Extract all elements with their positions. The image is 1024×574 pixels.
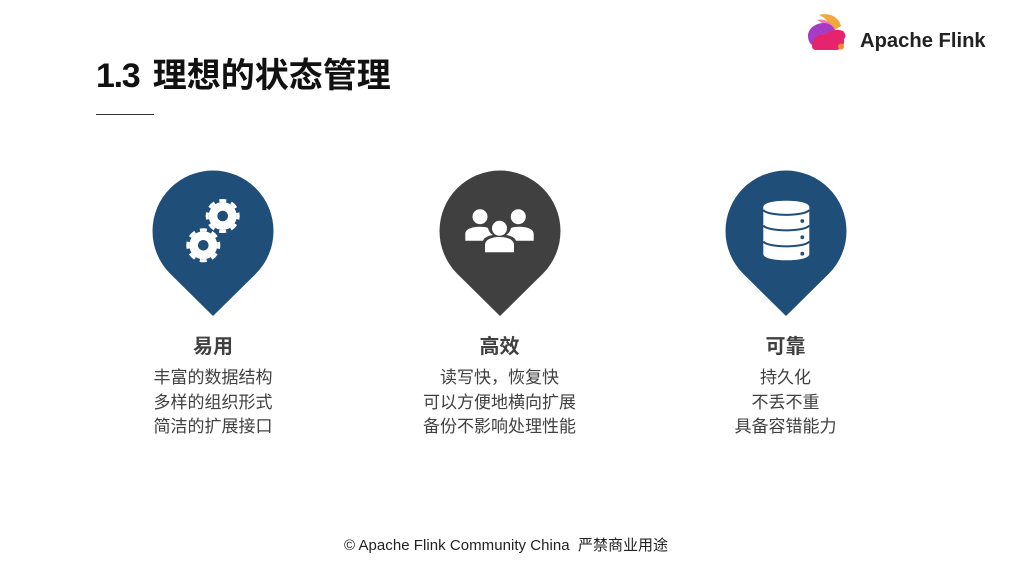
icon: database pin [726,170,846,316]
text: 易用: 简洁的扩展接口 [154,417,272,436]
text: 可靠: 具备容错能力 [734,417,836,436]
text: 可靠: 持久化 [760,368,811,387]
panel: 高效 [423,170,576,436]
logo: Apache Flink: Apache Flink [860,30,986,52]
text: 易用 [154,336,272,436]
text: 高效 [423,336,576,436]
text: 易用: 丰富的数据结构 [154,368,272,387]
text: 易用: 易用 [193,336,233,358]
icon: people pin [440,170,560,316]
text: 可靠 [734,336,836,436]
text: 高效: 备份不影响处理性能 [423,417,576,436]
text: 可靠: 不丢不重 [752,392,820,412]
panel: 可靠 [726,170,846,436]
title: 1.3 理想的状态管理 [96,57,391,95]
text: 高效: 读写快，恢复快 [440,368,559,387]
icon: gears pin [152,170,274,316]
logo: Apache Flink [808,14,986,52]
title underline [96,114,154,115]
footer: © Apache Flink Community China 严禁商业用途 [344,537,668,554]
panel: 易用 [152,170,274,436]
text: 高效: 高效 [480,336,520,358]
text: 可靠: 可靠 [766,336,806,358]
text: 高效: 可以方便地横向扩展 [423,392,576,412]
text: 易用: 多样的组织形式 [154,392,272,412]
